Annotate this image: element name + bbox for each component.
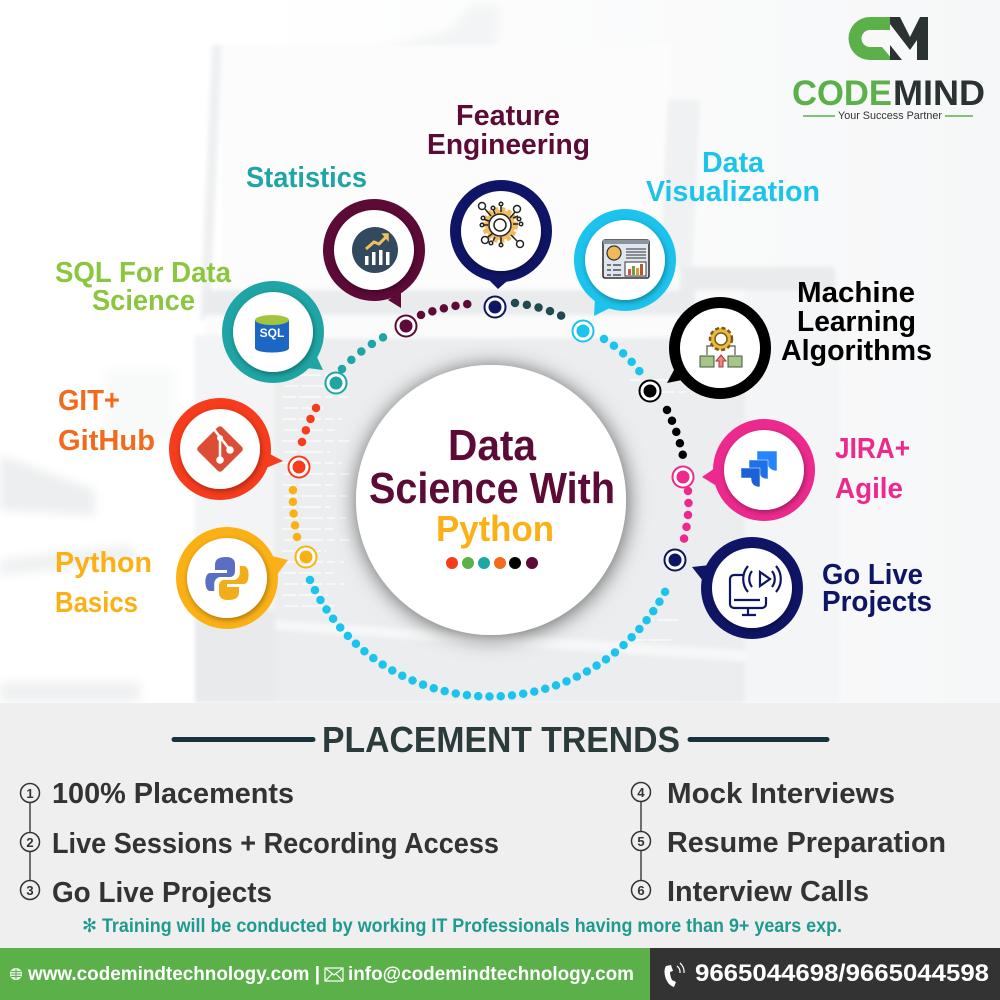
icon: python logo	[205, 557, 249, 600]
icon: live monitor	[730, 566, 781, 615]
icon: growth chart	[352, 227, 398, 273]
label: SQL For Data Science	[55, 257, 232, 317]
label: Feature Engineering: Feature	[456, 100, 560, 132]
list: placement benefits right	[632, 778, 946, 908]
icon: SQL database: SQL	[260, 326, 284, 340]
icon: gear with nodes	[478, 202, 524, 248]
footer: contact bar: www.codemindtechnology.com |	[27, 964, 320, 985]
label: GIT+ GitHub: GIT+	[58, 385, 120, 417]
label: SQL For Data Science: Science	[92, 285, 195, 317]
icon: jira logo	[741, 451, 777, 487]
list: placement benefits left: Go Live Projects	[52, 877, 272, 909]
bubble: Go Live Projects	[692, 537, 803, 639]
note: training: ✻ Training will be conducted by working IT Professionals having more than 9+ years exp.	[82, 916, 842, 937]
list: placement benefits left: 1	[26, 786, 34, 801]
label: Go Live Projects: Go Live	[822, 559, 923, 591]
label: Statistics: Statistics	[246, 162, 367, 194]
label: Machine Learning Algorithms: Algorithms	[781, 335, 932, 367]
logo: CodeMind: CODE	[792, 74, 892, 113]
list: placement benefits left: Live Sessions + Recording Access	[52, 828, 499, 860]
bubble: GIT+ GitHub	[169, 398, 283, 500]
background: blurred monitor	[0, 0, 1000, 705]
lower panel background	[0, 703, 1000, 949]
label: Data Visualization: Visualization	[646, 176, 820, 208]
label: Data Visualization	[646, 147, 820, 208]
bubble: Feature Engineering	[450, 180, 552, 289]
list: placement benefits right: Interview Calls	[667, 876, 869, 908]
timeline nodes	[288, 296, 694, 570]
list: placement benefits right: 5	[637, 834, 645, 849]
label: Machine Learning Algorithms: Machine	[797, 277, 915, 309]
footer: contact bar: 9665044698/9665044598	[695, 960, 989, 987]
logo: CodeMind	[792, 17, 985, 122]
central circle: Data Science With Python: Python	[436, 508, 554, 549]
list: placement benefits right: 6	[637, 883, 645, 898]
icon: globe	[10, 968, 22, 980]
label: Machine Learning Algorithms	[781, 277, 932, 367]
list: placement benefits left	[20, 778, 499, 909]
label: Go Live Projects: Projects	[822, 586, 932, 618]
heading: Placement Trends: PLACEMENT TRENDS	[322, 719, 680, 760]
label: JIRA+ Agile	[835, 433, 910, 505]
label: SQL For Data Science: SQL For Data	[55, 257, 232, 289]
label: Python Basics: Python	[55, 547, 152, 579]
list: placement benefits right: Mock Interviews	[667, 778, 895, 810]
bubble: Machine Learning Algorithms	[667, 297, 771, 399]
icon: phone	[664, 963, 684, 987]
label: Python Basics: Basics	[55, 587, 138, 619]
label: Go Live Projects	[822, 559, 932, 618]
list: placement benefits left: 2	[26, 835, 34, 850]
list: placement benefits right: Resume Preparation	[667, 827, 946, 859]
footer: contact bar: info@codemindtechnology.com	[348, 964, 634, 985]
bubble: Statistics	[323, 199, 425, 308]
central circle: Data Science With Python	[356, 365, 626, 635]
label: Python Basics	[55, 547, 152, 619]
icon: git logo	[196, 425, 244, 473]
list: placement benefits right: 4	[637, 785, 645, 800]
logo: CodeMind: Your Success Partner	[838, 110, 942, 122]
bubble: SQL For Data Science	[222, 281, 324, 383]
label: Feature Engineering: Engineering	[427, 129, 590, 161]
logo: CodeMind: MIND	[893, 74, 985, 113]
central circle: Data Science With Python: Science With	[369, 464, 615, 513]
list: placement benefits left: 100% Placements	[52, 778, 294, 810]
label: Data Visualization: Data	[702, 147, 765, 179]
bubble: Python Basics	[176, 527, 288, 629]
icon: envelope	[325, 968, 343, 981]
bubble: JIRA+ Agile	[702, 419, 815, 521]
central circle: Data Science With Python: Data	[448, 421, 536, 470]
footer: contact bar	[0, 948, 1000, 1000]
label: Machine Learning Algorithms: Learning	[797, 306, 916, 338]
bubble: Data Visualization	[574, 209, 676, 316]
label: JIRA+ Agile: Agile	[835, 473, 903, 505]
icon: dashboard window	[603, 240, 649, 278]
label: Feature Engineering	[427, 100, 590, 161]
icon: gear with books	[700, 328, 742, 367]
label: GIT+ GitHub: GitHub	[58, 425, 155, 457]
label: GIT+ GitHub	[58, 385, 155, 457]
label: JIRA+ Agile: JIRA+	[835, 433, 910, 465]
timeline dotted ring	[293, 303, 688, 697]
list: placement benefits left: 3	[26, 883, 34, 898]
